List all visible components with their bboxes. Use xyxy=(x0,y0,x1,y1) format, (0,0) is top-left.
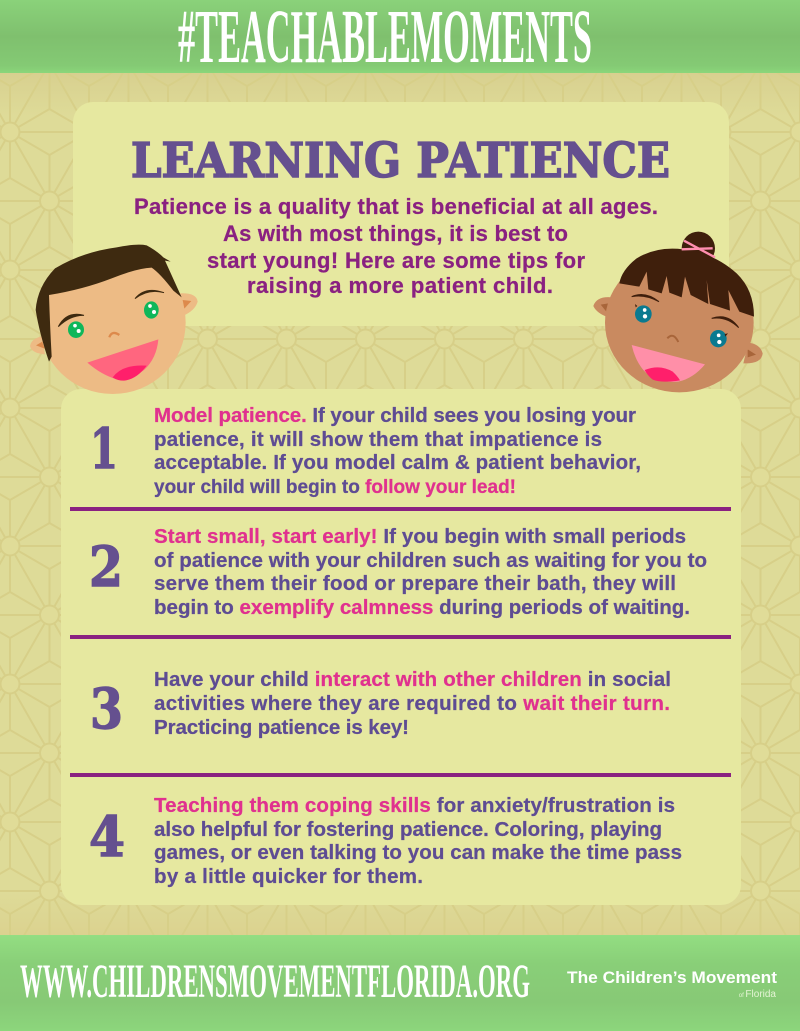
logo: the children's movement of florida: of Florida xyxy=(739,989,776,1000)
intro text: Patience is a quality that is beneficial at all ages. xyxy=(134,194,658,219)
tip 1 xyxy=(90,404,641,498)
tip 3 text: Practicing patience is key! xyxy=(154,716,409,739)
heading: learning patience: LEARNING PATIENCE xyxy=(131,133,670,189)
intro text xyxy=(134,194,658,298)
icon: boy face xyxy=(30,245,198,394)
tip 4 text: also helpful for fostering patience. Coloring, playing xyxy=(154,818,662,841)
tip 3 text xyxy=(154,668,671,739)
intro text: As with most things, it is best to xyxy=(223,221,568,246)
tip 4 xyxy=(89,794,682,888)
tip 1 text: Model patience. If your child sees you losing your xyxy=(154,404,636,427)
panel: tips xyxy=(61,389,741,905)
footer banner xyxy=(0,935,800,1031)
tip 2 text: begin to exemplify calmness during periods of waiting. xyxy=(154,596,690,619)
tip 2 xyxy=(89,525,707,619)
tip 1 text: patience, it will show them that impatience is xyxy=(154,428,602,451)
icon: girl face xyxy=(593,232,763,392)
tip 3 xyxy=(90,668,671,741)
tip 2 text: serve them their food or prepare their bath, they will xyxy=(154,572,676,595)
number 4: 4 xyxy=(89,804,125,869)
logo: the children's movement of florida xyxy=(567,968,777,1000)
tip 2 text: of patience with your children such as waiting for you to xyxy=(154,549,707,572)
panel: introduction xyxy=(73,102,729,326)
header banner xyxy=(0,0,800,79)
tip 3 text: activities where they are required to wait their turn. xyxy=(154,692,670,715)
tip 4 text: by a little quicker for them. xyxy=(154,865,423,888)
tip 1 text: your child will begin to follow your lead! xyxy=(154,477,516,498)
tip 1 text: acceptable. If you model calm & patient behavior, xyxy=(154,451,641,474)
intro text: start young! Here are some tips for xyxy=(207,248,585,273)
intro text: raising a more patient child. xyxy=(247,273,553,298)
tip 4 text: Teaching them coping skills for anxiety/frustration is xyxy=(154,794,675,817)
number 2: 2 xyxy=(89,534,123,599)
tip 3 text: Have your child interact with other children in social xyxy=(154,668,671,691)
number 1: 1 xyxy=(90,416,118,481)
tip 4 text xyxy=(154,794,682,888)
logo: the children's movement of florida: The Children’s Movement xyxy=(567,968,777,987)
tip 2 text xyxy=(154,525,707,619)
tip 1 text xyxy=(154,404,641,498)
number 3: 3 xyxy=(90,676,123,741)
tip 2 text: Start small, start early! If you begin with small periods xyxy=(154,525,686,548)
tip 4 text: games, or even talking to you can make the time pass xyxy=(154,841,682,864)
